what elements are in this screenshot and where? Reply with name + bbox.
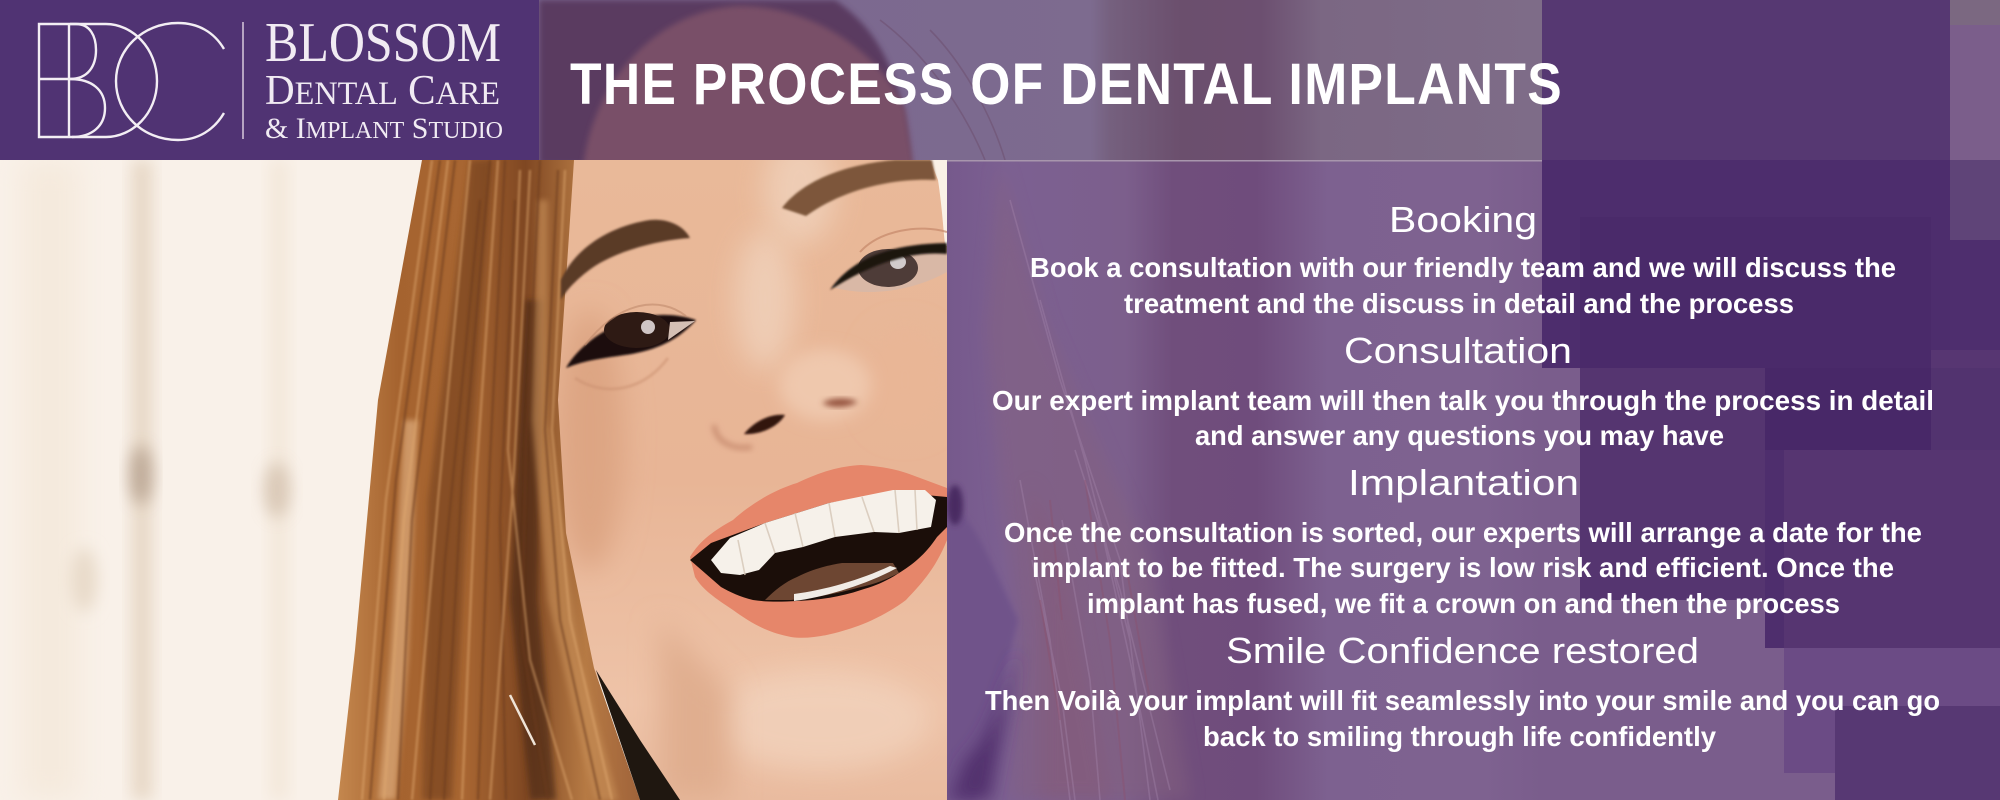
text: Implantation description [1004,517,1922,619]
text: Consultation description: and answer any questions you may have [1195,420,1724,451]
text: Smile Confidence description [985,685,1940,752]
header right square [1542,0,1950,160]
mouth: lips, teeth, tongue [690,465,947,638]
text: Booking description: Book a consultation with our friendly team and we will discuss the [1030,252,1896,283]
logo mark: BDC monogram [39,23,224,140]
skin: face and neck [540,160,947,800]
header divider line [947,160,1542,162]
nose and nostril [714,398,858,448]
text: Smile Confidence description: back to smiling through life confidently [1203,721,1717,752]
left eyebrow [561,220,690,300]
text: Consultation description: Our expert implant team will then talk you through the process in detail [992,385,1934,416]
step 3: Implantation [1004,462,1922,619]
panel: logo [0,0,539,160]
face shading [556,135,947,800]
decorative purple squares [1542,160,2000,800]
step 1: Booking [1030,199,1896,319]
heading: Smile Confidence restored: Smile Confidence restored [1226,630,1699,671]
heading: Booking: Booking [1389,199,1537,240]
step 2: Consultation [992,330,1934,451]
logo wordmark: Blossom: BLOSSOM [265,12,501,74]
text: Implantation description: Once the consultation is sorted, our experts will arrange a date for the [1004,517,1922,548]
text: Consultation description [992,385,1934,451]
text: Booking description: treatment and the discuss in detail and the process [1124,288,1794,319]
text: Smile Confidence description: Then Voilà your implant will fit seamlessly into your smile and you can go [985,685,1940,716]
logo background [0,0,539,160]
panel base tint [1150,162,1284,800]
photo background: blurred curtain [0,160,640,800]
logo wordmark: Dental Care: DENTAL CARE [265,68,500,114]
text: Implantation description: implant to be fitted. The surgery is low risk and efficient. Once the [1032,552,1894,583]
left eye [566,305,696,389]
hair: left strands [338,160,680,800]
purple-tinted hair and jaw [947,200,1180,800]
heading: Consultation: Consultation [1344,330,1572,371]
header tinted photo strip [539,0,1542,170]
photo: smiling woman [0,135,947,800]
heading: Implantation: Implantation [1348,462,1579,503]
right eyebrow [782,160,936,216]
text: Booking description [1030,252,1896,319]
title: THE PROCESS OF DENTAL IMPLANTS [570,52,1563,117]
logo wordmark: Implant Studio: & IMPLANT STUDIO [265,112,503,145]
panel: purple text panel [947,160,2000,800]
step 4: Smile Confidence restored [985,630,1940,752]
text: Implantation description: implant has fused, we fit a crown on and then the process [1087,588,1840,619]
logo divider [242,22,244,139]
header band [539,0,2000,170]
right eye [830,229,947,292]
